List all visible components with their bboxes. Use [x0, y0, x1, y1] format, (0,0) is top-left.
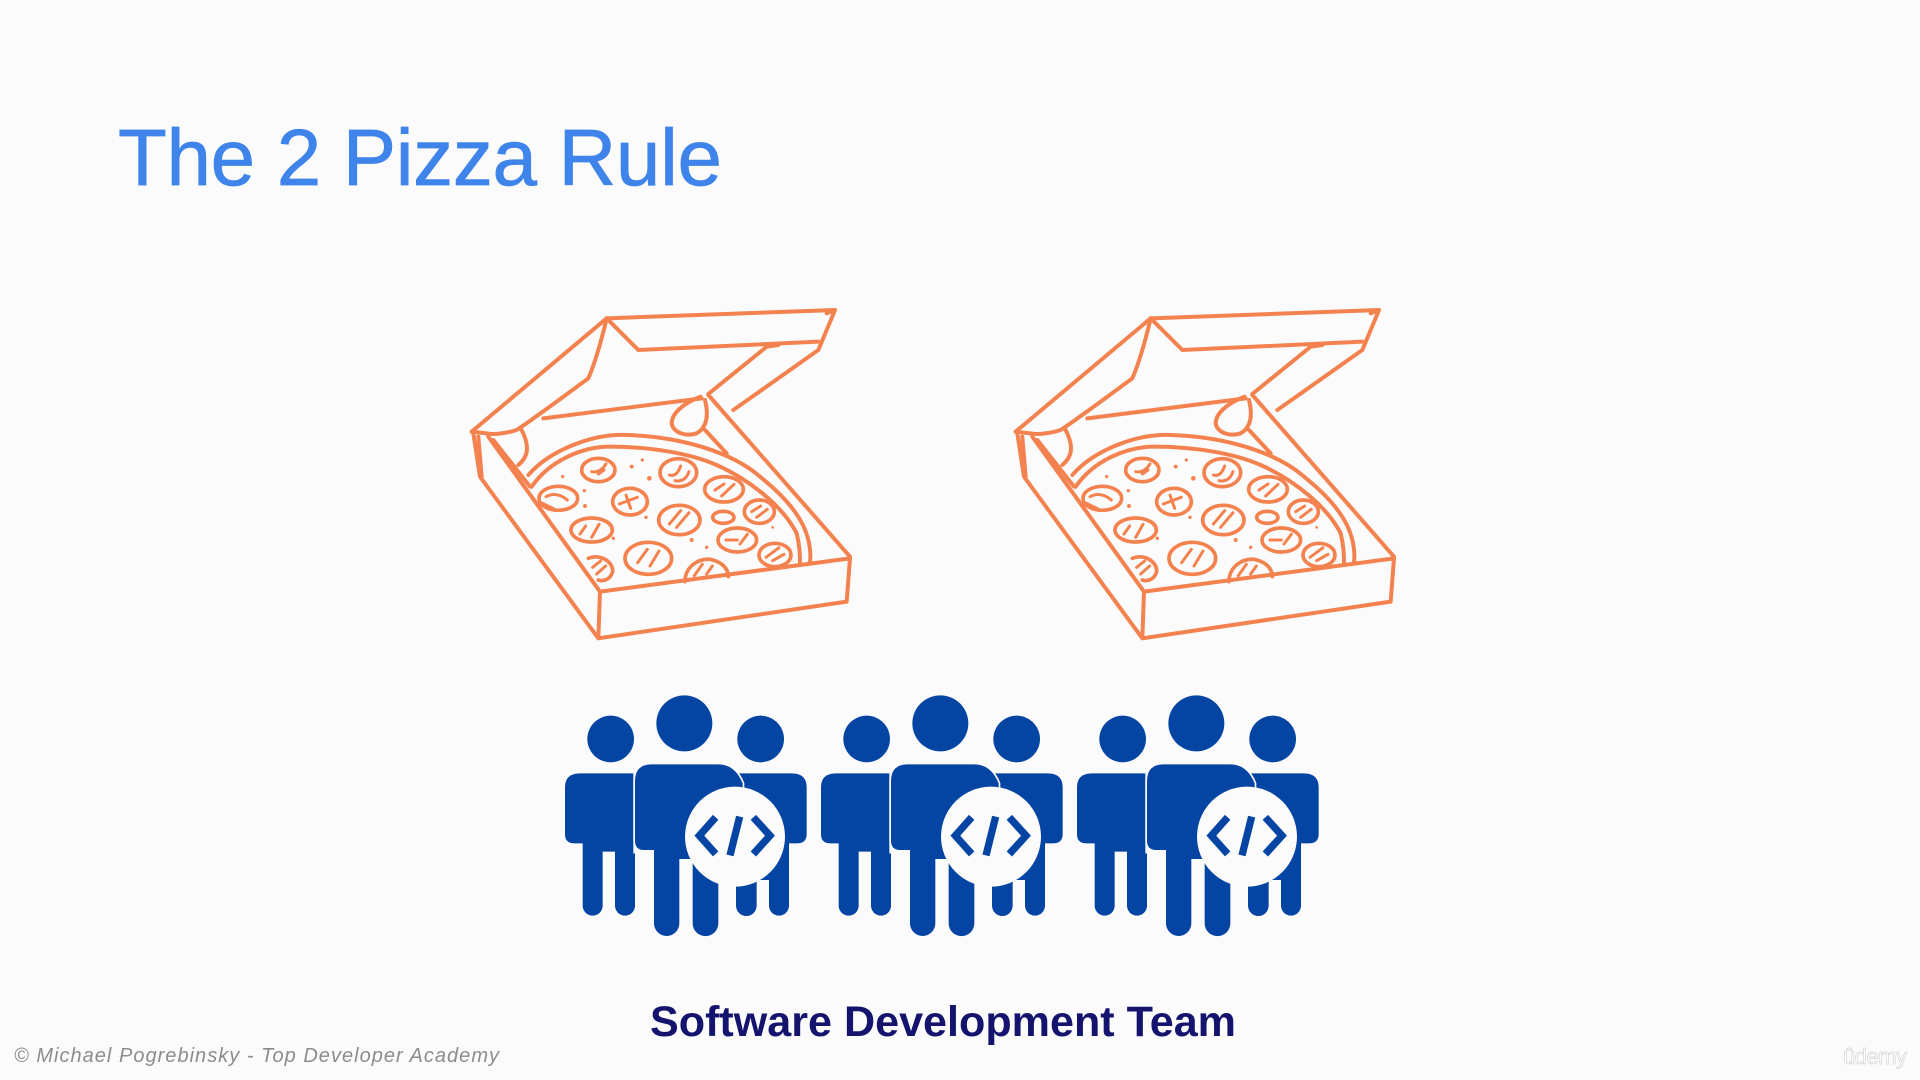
- icon: right pizza box: [1016, 310, 1394, 638]
- icon: developer group 3: [1077, 695, 1319, 936]
- icon: developer group 1: [565, 695, 807, 936]
- title: The 2 Pizza Rule: [118, 113, 722, 202]
- icon: developer group 2: [821, 695, 1063, 936]
- copyright footer: © Michael Pogrebinsky - Top Developer Academy: [14, 1045, 500, 1067]
- team label: Software Development Team: [650, 998, 1236, 1046]
- watermark: ûdemy: [1843, 1044, 1907, 1069]
- icon: left pizza box: [472, 310, 850, 638]
